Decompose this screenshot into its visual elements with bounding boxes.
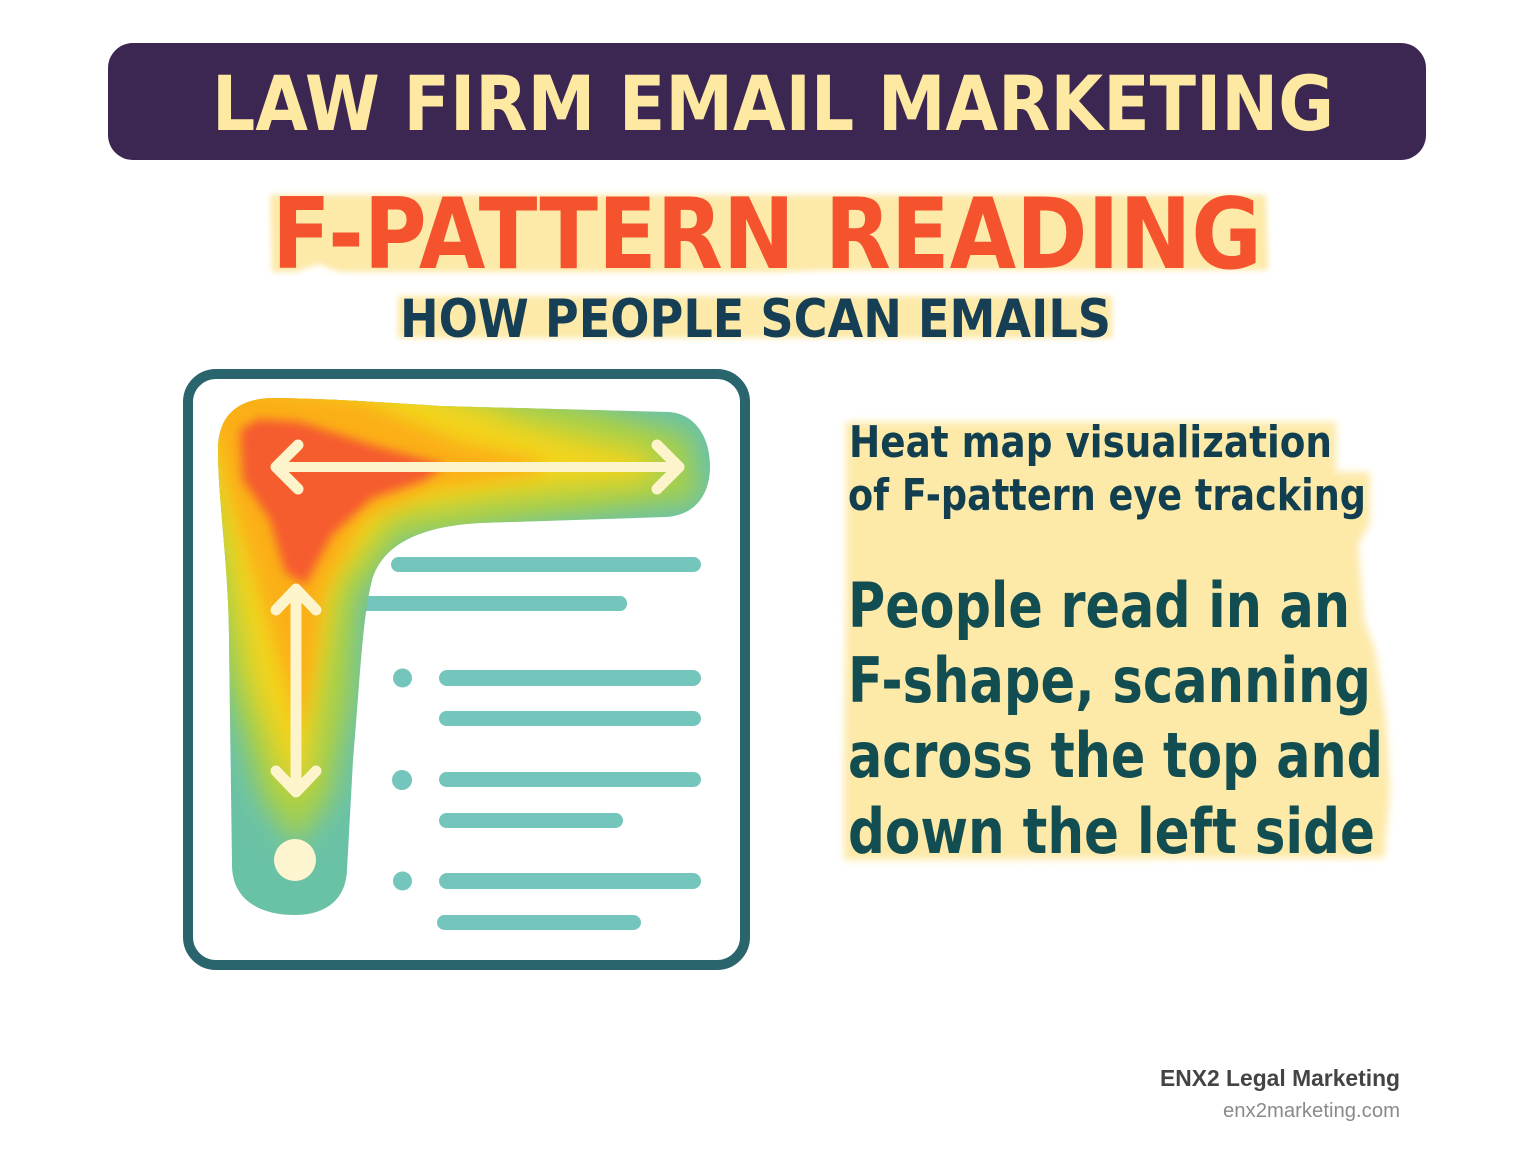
main statement text: across the top and xyxy=(848,719,1383,792)
title text: LAW FIRM EMAIL MARKETING xyxy=(212,59,1334,148)
title banner xyxy=(108,43,1426,160)
footer credit xyxy=(1160,1065,1400,1122)
heat map F shape xyxy=(218,398,710,915)
panel: email heat map illustration xyxy=(180,374,745,965)
caption text xyxy=(848,417,1366,521)
subheading: how people scan emails: HOW PEOPLE SCAN EMAILS xyxy=(400,289,1111,350)
heading: F-pattern reading: F-PATTERN READING xyxy=(272,178,1262,292)
callout: explanatory text xyxy=(844,417,1390,868)
caption text: Heat map visualization xyxy=(849,417,1332,468)
footer credit: enx2marketing.com xyxy=(1223,1100,1400,1122)
main statement text: down the left side xyxy=(848,795,1375,868)
caption text: of F-pattern eye tracking xyxy=(848,470,1366,521)
start dot xyxy=(274,839,316,881)
email frame xyxy=(188,374,745,965)
vertical scan arrow xyxy=(276,589,316,792)
text line placeholders xyxy=(355,557,701,930)
main statement text: F-shape, scanning xyxy=(848,644,1371,717)
main statement text xyxy=(848,569,1383,868)
main statement text: People read in an xyxy=(848,569,1350,642)
horizontal scan arrow xyxy=(276,445,679,489)
cream highlight background xyxy=(844,422,1390,860)
footer credit: ENX2 Legal Marketing xyxy=(1160,1065,1400,1091)
